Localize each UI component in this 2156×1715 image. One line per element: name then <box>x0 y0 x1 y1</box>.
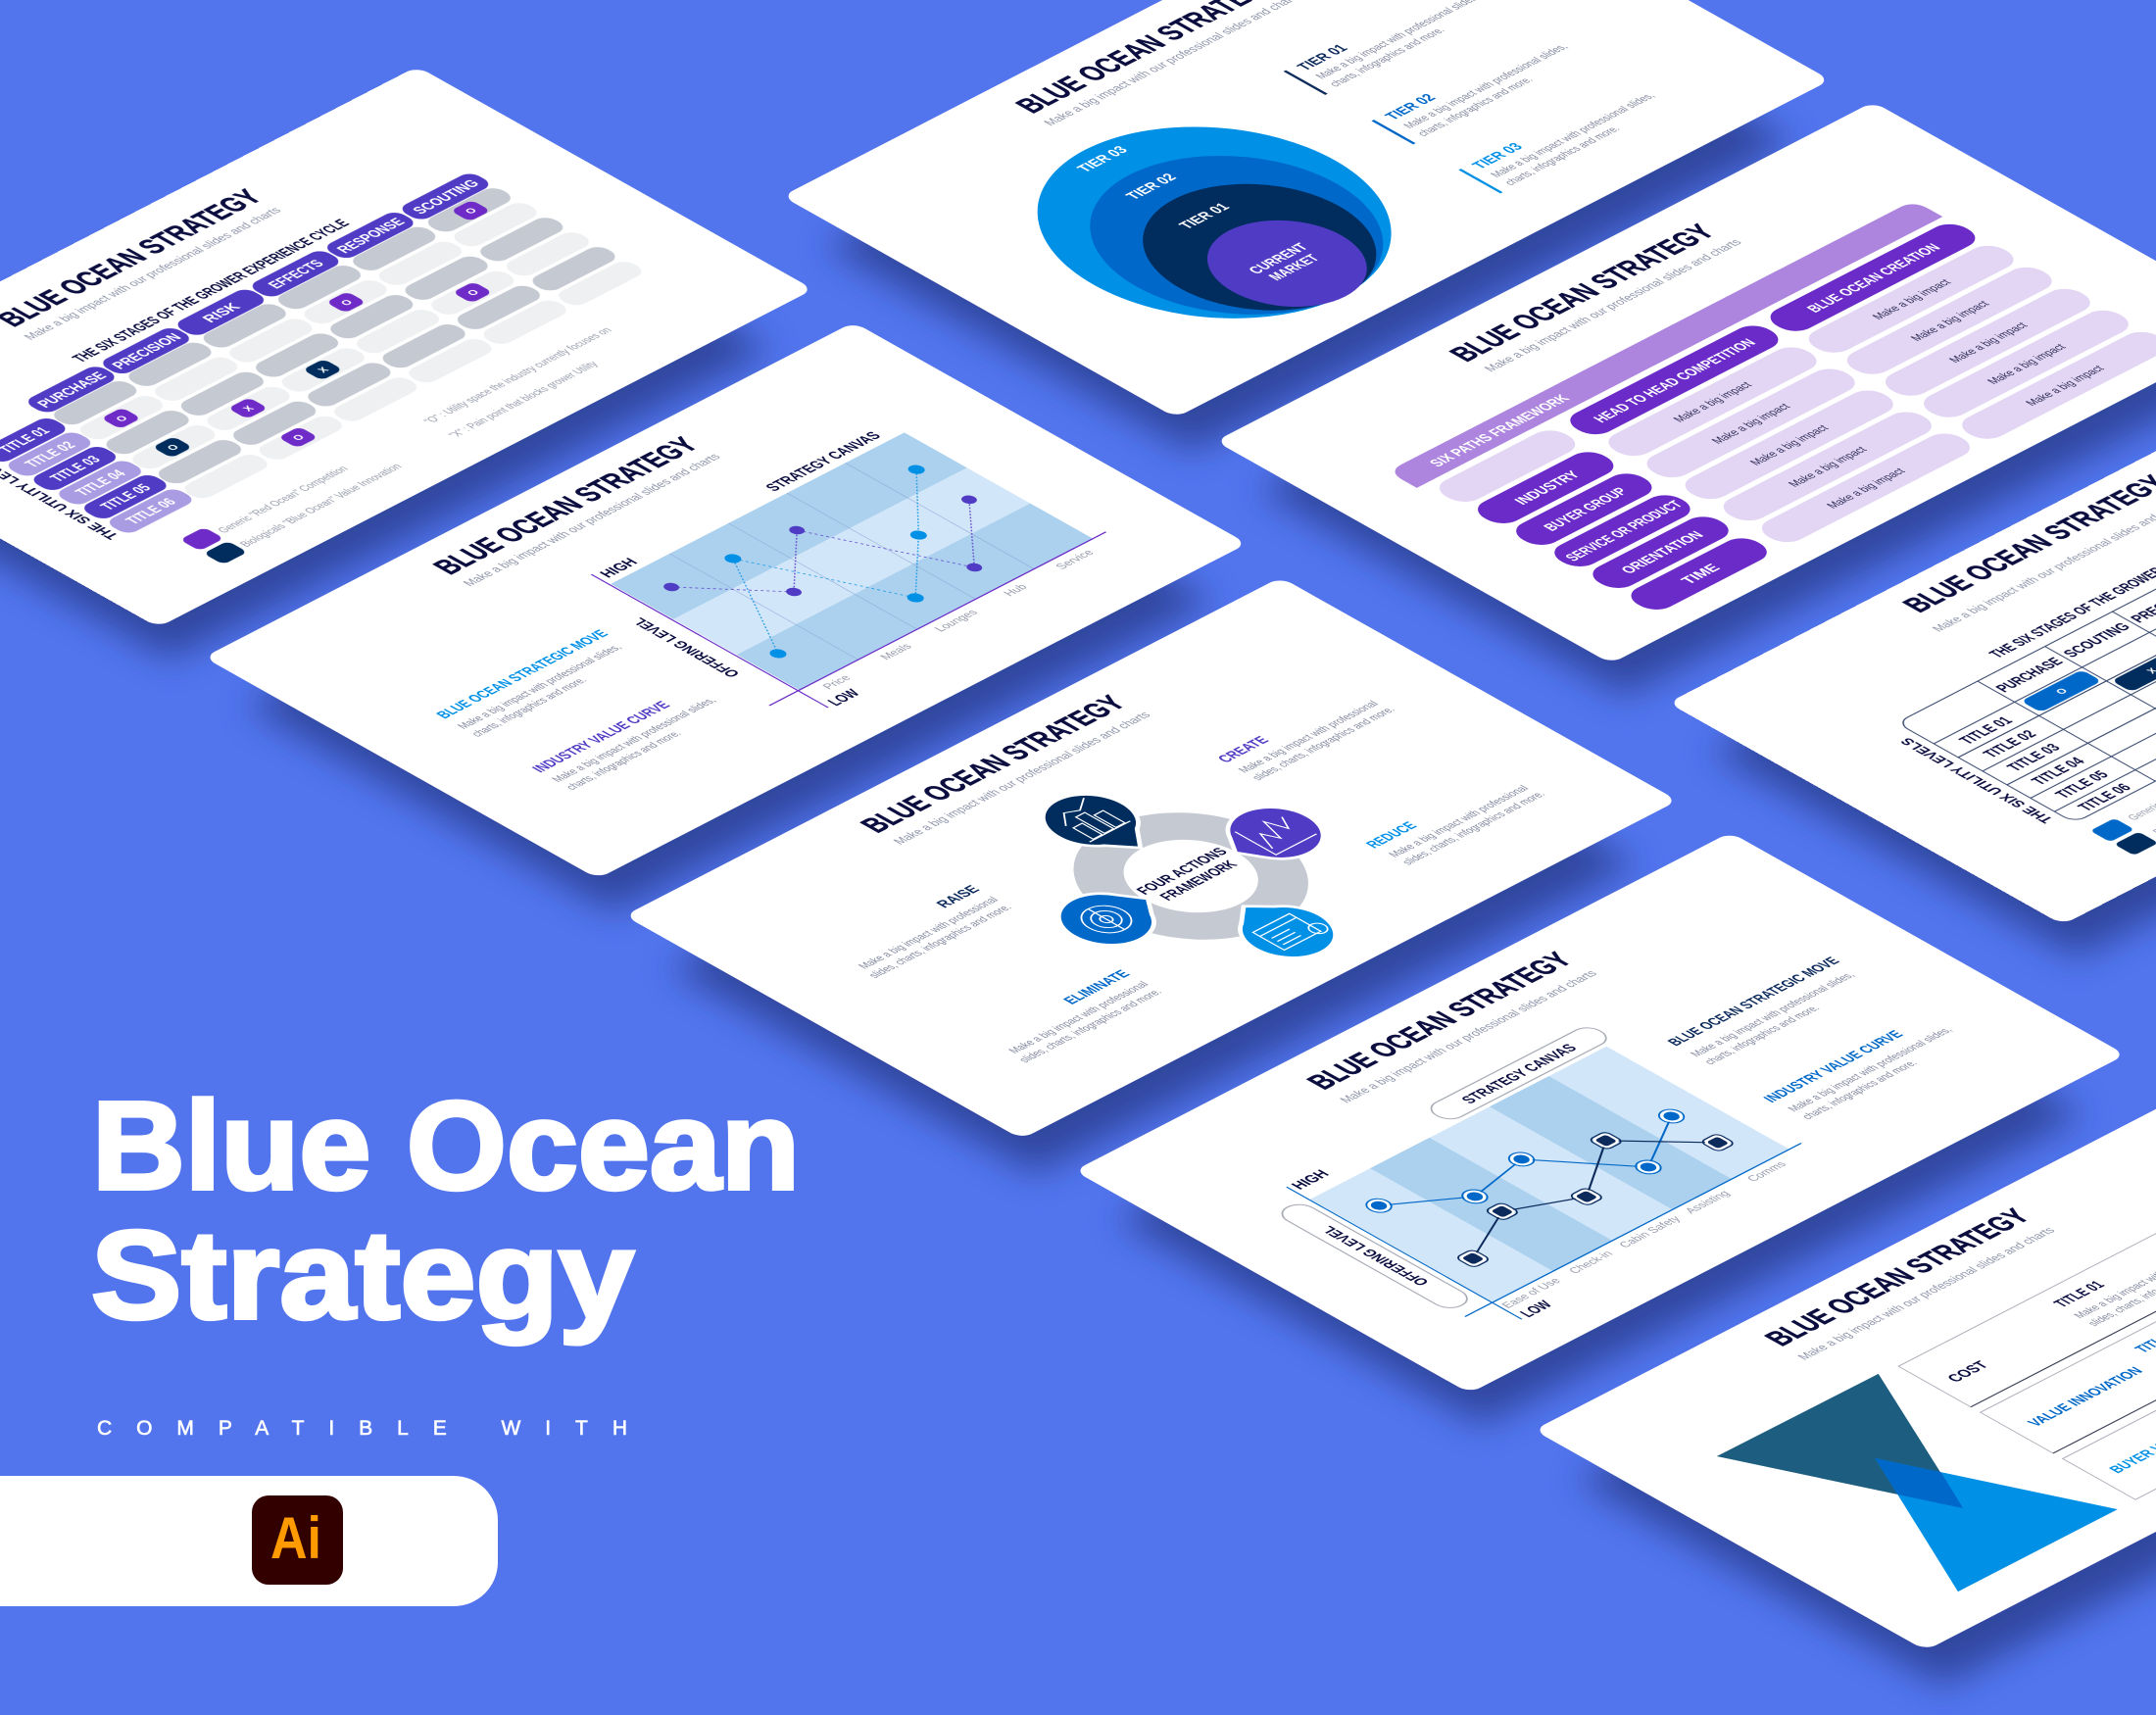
icon: illustrator logo <box>252 1495 343 1585</box>
row title pills: TITLE 05 <box>97 482 155 513</box>
matrix markers: O <box>290 433 308 443</box>
nested circles chart: MARKET <box>1265 252 1324 283</box>
value curve text: charts, infographics and more. <box>564 729 684 792</box>
factor column: INDUSTRY <box>1511 468 1585 508</box>
stage header pills: SCOUTING <box>410 177 484 217</box>
value curve text: Make a big impact with professional slides, <box>549 696 719 784</box>
tier 03 text <box>1457 80 1672 194</box>
head to head column: Make a big impact <box>1670 379 1755 424</box>
column headers: PURCHASE <box>1992 656 2067 695</box>
panel: strategy canvas line chart <box>1074 832 2126 1394</box>
factor column: TIME <box>1678 562 1725 587</box>
canvas line chart <box>1249 1024 1837 1338</box>
tier 02 text: charts, infographics and more. <box>1415 75 1536 138</box>
canvas line chart: OFFERING LEVEL <box>1318 1224 1433 1288</box>
value curve text: INDUSTRY VALUE CURVE <box>529 699 674 775</box>
panel: strategy canvas dotted <box>204 322 1248 879</box>
cost row: COST <box>1944 1359 1993 1385</box>
tier 03 text: Make a big impact with professional slides, <box>1488 91 1658 179</box>
head to head column: Make a big impact <box>1786 444 1870 489</box>
nested circles chart: CURRENT <box>1246 241 1313 276</box>
head to head column: Make a big impact <box>1746 422 1832 467</box>
strategic move text: BLUE OCEAN STRATEGIC MOVE <box>433 628 612 721</box>
subtitle: Make a big impact with our professional slides and charts <box>1337 968 1600 1104</box>
canvas line chart: HIGH <box>1289 1168 1334 1192</box>
tier 02 text: TIER 02 <box>1382 92 1440 122</box>
canvas chart: Price <box>820 673 854 691</box>
row title pills: TITLE 04 <box>72 467 130 499</box>
value innovation row <box>1981 1213 2156 1453</box>
head to head column: Make a big impact <box>1824 466 1909 511</box>
row title pills: TITLE 03 <box>46 454 105 484</box>
eliminate text: slides, charts, infographics and more. <box>1016 987 1165 1064</box>
reduce text: REDUCE <box>1362 820 1421 851</box>
panel: six stages pill matrix <box>0 67 813 627</box>
row titles: TITLE 05 <box>2052 768 2113 801</box>
row title pills <box>0 416 197 535</box>
utility levels label: THE SIX UTILITY LEVELS <box>1897 735 2057 825</box>
canvas chart: OFFERING LEVEL <box>629 615 744 679</box>
row titles: TITLE 02 <box>1981 728 2041 760</box>
title <box>91 1076 800 1346</box>
eliminate text: ELIMINATE <box>1060 968 1134 1006</box>
heading: BLUE OCEAN STRATEGY <box>426 433 707 579</box>
stage header pills <box>24 172 494 415</box>
row titles: TITLE 06 <box>2075 781 2135 813</box>
matrix markers: O <box>465 288 482 298</box>
legend: Biologicals "Blue Ocean" Value Innovation <box>237 462 405 549</box>
cost row: TITLE 01 <box>2050 1279 2109 1309</box>
canvas line chart: STRATEGY CANVAS <box>1458 1042 1581 1106</box>
factor column: SERVICE OR PRODUCT <box>1562 498 1688 564</box>
stage header pills: RESPONSE <box>333 216 410 256</box>
row titles: TITLE 03 <box>2004 742 2065 774</box>
tier 03 text: charts, infographics and more. <box>1502 124 1623 187</box>
icon: trend bubble <box>1201 797 1343 873</box>
matrix markers: O <box>113 414 130 423</box>
panel: six paths framework <box>1215 102 2156 663</box>
blue ocean creation column: Make a big impact <box>1869 277 1954 321</box>
strategic move text: charts, infographics and more. <box>1701 1004 1823 1066</box>
framework band: SIX PATHS FRAMEWORK <box>1426 392 1574 469</box>
canvas line chart: Assisting <box>1683 1189 1733 1215</box>
create text: Make a big impact with professional <box>1236 699 1382 775</box>
title: Blue Ocean <box>92 1076 800 1216</box>
triangles diagram <box>1717 1373 2119 1592</box>
buyer value row <box>2063 1259 2156 1499</box>
reduce text: Make a big impact with professional <box>1386 784 1532 859</box>
canvas chart: LOW <box>824 687 864 709</box>
blue ocean creation column: Make a big impact <box>1945 320 2031 365</box>
create text: CREATE <box>1214 734 1273 765</box>
tier 01 text <box>1282 0 1496 95</box>
stage header pills: EFFECTS <box>265 258 328 291</box>
canvas chart: HIGH <box>597 557 642 580</box>
reduce text: slides, charts, infographics and more. <box>1399 790 1548 867</box>
panel: value innovation triangles <box>1534 1091 2156 1650</box>
canvas chart: Meals <box>877 642 915 662</box>
value curve text: Make a big impact with professional slides, <box>1786 1025 1955 1113</box>
stage header pills: RISK <box>199 301 245 325</box>
matrix markers: X <box>316 366 332 374</box>
compatibility badge <box>0 1476 498 1606</box>
tier 01 text: charts, infographics and more. <box>1327 25 1448 89</box>
icon: illustrator logo: Ai <box>270 1505 321 1571</box>
blue ocean creation column: Make a big impact <box>1907 299 1992 343</box>
legend <box>179 445 408 564</box>
raise text: RAISE <box>933 883 984 910</box>
matrix cells <box>48 185 647 501</box>
row titles <box>1956 714 2135 813</box>
title: Strategy <box>91 1205 634 1346</box>
framework band <box>1388 200 1942 488</box>
notes: "X" : Pain point that blocks grower Utility <box>446 360 601 440</box>
heading: BLUE OCEAN STRATEGY <box>1300 949 1580 1094</box>
table grid <box>1897 469 2156 823</box>
strategic move text: BLUE OCEAN STRATEGIC MOVE <box>1664 955 1843 1049</box>
compatible label: COMPATIBLE WITH <box>97 1417 627 1440</box>
head to head column <box>1561 321 1979 547</box>
canvas chart: STRATEGY CANVAS <box>762 430 885 494</box>
heading: BLUE OCEAN STRATEGY <box>1443 220 1723 366</box>
legend <box>2090 734 2156 856</box>
canvas chart: Service <box>1053 548 1097 571</box>
canvas line chart: Comms <box>1744 1159 1789 1184</box>
column headers <box>1992 586 2156 695</box>
notes: "O" : Utility space the industry currently focuses on <box>421 325 614 426</box>
heading: BLUE OCEAN STRATEGY <box>0 185 270 331</box>
value curve text: charts, infographics and more. <box>1799 1058 1921 1121</box>
tier 02 text: Make a big impact with professional slides, <box>1400 42 1571 130</box>
factor column: BUYER GROUP <box>1541 485 1632 533</box>
column headers: SCOUTING <box>2060 621 2134 660</box>
canvas line chart: Cabin Safety <box>1616 1214 1684 1250</box>
row title pills: TITLE 06 <box>122 496 180 527</box>
tier 03 text: TIER 03 <box>1469 141 1527 172</box>
icon: dashboard bubble <box>1210 890 1355 968</box>
tier 01 text: TIER 01 <box>1294 42 1351 73</box>
nested circles chart: TIER 02 <box>1122 172 1181 202</box>
strategic move text: Make a big impact with professional slides, <box>455 643 624 731</box>
canvas line chart: LOW <box>1517 1298 1556 1320</box>
blue ocean creation column <box>1762 220 2156 444</box>
stage header pills: PRECISION <box>109 331 186 371</box>
nested circles chart: TIER 01 <box>1176 201 1234 231</box>
strategic move text: charts, infographics and more. <box>468 675 590 739</box>
canvas chart: Lounges <box>932 608 981 634</box>
table markers <box>2021 636 2156 726</box>
raise text: Make a big impact with professional <box>856 895 1002 971</box>
nested circles chart <box>964 87 1466 359</box>
panel: four actions framework <box>624 577 1678 1139</box>
ring diagram: FRAMEWORK <box>1156 858 1242 903</box>
factor column: ORIENTATION <box>1618 529 1708 576</box>
panel: tiers of noncustomers <box>782 0 1831 417</box>
matrix markers: O <box>165 443 182 453</box>
blue ocean creation column: Make a big impact <box>2023 364 2108 408</box>
blue ocean creation column: BLUE OCEAN CREATION <box>1803 242 1944 315</box>
row titles: TITLE 04 <box>2029 756 2089 787</box>
matrix markers: X <box>240 404 258 414</box>
stages heading: THE SIX STAGES OF THE GROWER EXPERIENCE CYCLE <box>70 218 354 365</box>
heading: BLUE OCEAN STRATEGY <box>854 692 1134 837</box>
factor column <box>1431 426 1776 614</box>
table markers: O <box>2053 687 2071 697</box>
head to head column: Make a big impact <box>1708 401 1793 446</box>
value curve text: INDUSTRY VALUE CURVE <box>1760 1028 1907 1105</box>
head to head column: HEAD TO HEAD COMPETITION <box>1591 337 1760 425</box>
subtitle: Make a big impact with our professional slides and charts <box>21 206 284 342</box>
strategic move text: Make a big impact with professional slides, <box>1688 970 1858 1058</box>
row titles: TITLE 01 <box>1956 714 2017 747</box>
canvas line chart: Ease of Use <box>1499 1276 1564 1310</box>
matrix markers <box>75 200 618 487</box>
icon: target bubble <box>1039 879 1182 956</box>
blue ocean creation column: Make a big impact <box>1984 342 2070 386</box>
stage header pills: PURCHASE <box>34 369 111 411</box>
row title pills: TITLE 02 <box>22 439 79 470</box>
subtitle: Make a big impact with our professional slides and charts <box>890 710 1153 847</box>
subtitle: Make a big impact with our professional slides and charts <box>461 452 723 588</box>
canvas chart <box>562 416 1142 726</box>
legend: Generic "Red Ocean" Competition <box>215 465 351 535</box>
icon: chart bubble <box>1023 784 1172 864</box>
raise text: slides, charts, infographics and more. <box>866 903 1014 980</box>
tier 02 text <box>1370 31 1585 145</box>
canvas line chart: Check-in <box>1566 1250 1616 1276</box>
ring diagram <box>1060 806 1321 947</box>
matrix markers: O <box>463 207 480 216</box>
subtitle: Make a big impact with our professional slides and charts <box>1482 237 1744 373</box>
canvas chart: Hub <box>1001 582 1031 598</box>
create text: slides, charts, infographics and more. <box>1250 705 1398 782</box>
heading: BLUE OCEAN STRATEGY <box>1758 1204 2037 1350</box>
matrix markers: O <box>338 298 356 308</box>
ring diagram: FOUR ACTIONS <box>1133 846 1232 897</box>
eliminate text: Make a big impact with professional <box>1005 980 1152 1055</box>
subtitle: Make a big impact with our professional slides and charts <box>1794 1225 2058 1362</box>
cost row <box>1898 1167 2156 1407</box>
nested circles chart: TIER 03 <box>1074 144 1132 174</box>
panel: six stages table <box>1668 363 2156 925</box>
